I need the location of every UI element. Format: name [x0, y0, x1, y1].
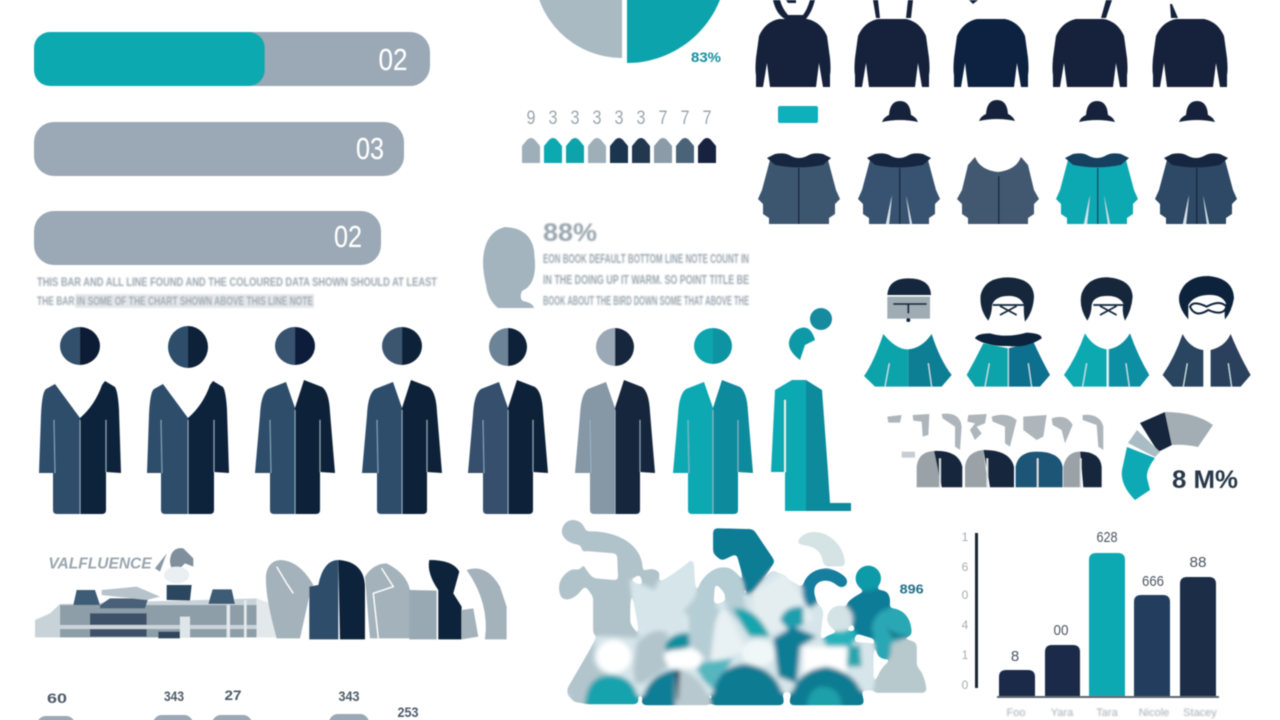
caption under bars: THE BAR IN SOME OF THE CHART SHOWN ABOVE THIS LINE NOTE [37, 296, 313, 308]
category labels: Yara [1051, 707, 1074, 719]
caption under bars [37, 277, 437, 308]
caption under bars: THIS BAR AND ALL LINE FOUND AND THE COLOURED DATA SHOWN SHOULD AT LEAST [37, 277, 437, 289]
value labels [1011, 529, 1206, 665]
y axis: 1 [962, 530, 969, 544]
value labels: 628 [1096, 529, 1118, 546]
pie chart [534, 0, 727, 65]
category labels: Tara [1096, 707, 1119, 719]
crowd shapes [559, 520, 927, 705]
y axis: 6 [962, 560, 969, 574]
gauge chart [1122, 412, 1213, 500]
center teal figures [733, 608, 770, 637]
stat text block: IN THE DOING UP IT WARM. SO POINT TITLE BE [543, 272, 749, 287]
figure 4 neck [1101, 0, 1112, 18]
small head [155, 548, 193, 583]
bottom pictogram numbers and heads: 253 [398, 704, 419, 720]
bottom pictogram numbers and heads: 27 [224, 687, 242, 703]
y axis: 0 [962, 588, 969, 602]
gauge value: 8 M% [1172, 466, 1238, 494]
small icon row chart: 9 [526, 108, 536, 129]
small icon row chart [522, 108, 716, 163]
sleeve highlights [885, 348, 1232, 387]
small icon row chart: 7 [702, 108, 712, 129]
bar chart [962, 529, 1219, 719]
inner sleeve lines [54, 410, 738, 514]
progress bar 3 [34, 211, 381, 265]
row: teal figures with glasses [864, 276, 1251, 387]
bottom pictogram numbers and heads: 343 [164, 688, 184, 704]
bottom pictogram numbers and heads [37, 687, 419, 720]
category labels: Foo [1007, 707, 1025, 719]
progress bar 2 [34, 122, 404, 176]
value labels: 8 [1011, 648, 1019, 665]
icon: head silhouette [483, 227, 535, 308]
figure 2 neck [873, 0, 913, 18]
small icon row chart: 7 [658, 108, 668, 129]
value labels: 666 [1142, 573, 1164, 590]
arc figure [808, 575, 842, 602]
arch figures [917, 450, 1102, 487]
value labels: 88 [1190, 554, 1206, 571]
figure 3 [1064, 277, 1149, 387]
figure 6 [575, 328, 655, 514]
bottom pictogram numbers and heads: 343 [338, 688, 360, 704]
progress bar 1 [34, 32, 430, 86]
figure 8 [771, 308, 851, 511]
skyline heading: VALFLUENCE [48, 555, 152, 572]
pie chart: 83% [691, 49, 722, 65]
teal group right [856, 566, 881, 591]
dark teal figure [713, 528, 775, 596]
gray figure [559, 520, 643, 638]
crowd illustration [559, 520, 927, 705]
figure 2 [967, 277, 1050, 387]
crowd value: 896 [900, 582, 924, 596]
small icon row chart: 3 [636, 108, 646, 129]
stat text block [543, 219, 749, 308]
skyline illustration [35, 548, 507, 639]
value labels: 00 [1054, 622, 1068, 639]
bottom row [567, 638, 613, 703]
y axis: 1 [962, 648, 969, 662]
progress bar 1: 02 [378, 42, 408, 77]
progress bar 2: 03 [356, 131, 384, 166]
figure 4 [1163, 276, 1251, 387]
y axis [962, 530, 978, 692]
category labels [1007, 707, 1217, 719]
stat text block: EON BOOK DEFAULT BOTTOM LINE NOTE COUNT IN [543, 251, 749, 266]
bottom pictogram numbers and heads: 60 [47, 690, 67, 706]
stat text block: 88% [543, 219, 597, 247]
white faces [597, 640, 631, 673]
category labels: Stacey [1183, 707, 1217, 719]
row: dark sweater figures [756, 0, 1228, 87]
figure 1 neck [773, 0, 815, 19]
small icon row chart: 3 [592, 108, 602, 129]
figure 4 [362, 327, 442, 514]
figure 1 [39, 327, 121, 514]
small icon row chart: 3 [570, 108, 580, 129]
small icon row chart: 7 [680, 108, 690, 129]
row: jackets [758, 153, 1237, 224]
row: hats [778, 100, 1215, 123]
y axis: 4 [962, 618, 969, 632]
small icon row chart: 3 [548, 108, 558, 129]
small figure row [887, 414, 1103, 487]
bars [997, 553, 1219, 698]
buildings [35, 585, 277, 638]
figure 7 [673, 328, 753, 514]
small icon row chart: 3 [614, 108, 624, 129]
figure 3 [255, 327, 335, 514]
figure 2 [147, 326, 229, 514]
mid figure [683, 567, 747, 663]
figure 5 neck [1170, 4, 1178, 18]
progress bar 3: 02 [334, 219, 362, 254]
arch figures [266, 560, 507, 639]
figure 1 [864, 278, 952, 387]
figure 3 mark [969, 0, 978, 4]
row: robed figures [39, 308, 851, 514]
figure 5 [468, 328, 548, 514]
category labels: Nicole [1139, 707, 1169, 719]
y axis: 0 [962, 678, 969, 692]
stat text block: BOOK ABOUT THE BIRD DOWN SOME THAT ABOVE THE [543, 293, 749, 308]
back layer light [567, 558, 873, 697]
faded chunks [887, 414, 1103, 458]
